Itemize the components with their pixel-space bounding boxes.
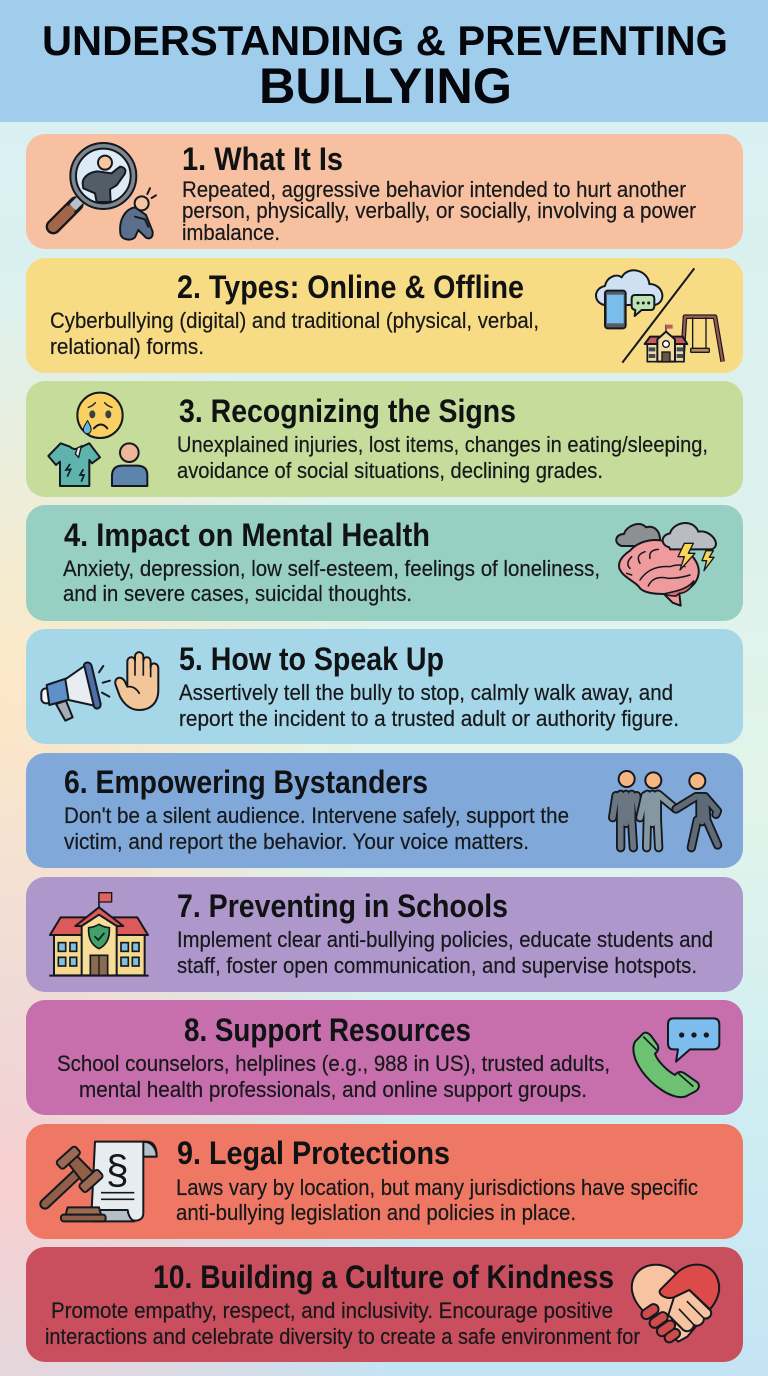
heading 10: 10. Building a Culture of Kindness: [153, 1259, 614, 1295]
heading 4: 4. Impact on Mental Health: [64, 517, 430, 553]
title line 1: UNDERSTANDING & PREVENTING: [42, 17, 728, 64]
body 8: School counselors, helplines (e.g., 988 in US), trusted adults,: [57, 1051, 610, 1076]
body 6: victim, and report the behavior. Your voice matters.: [64, 829, 529, 854]
panel 6: empowering bystanders: [26, 753, 743, 868]
body 8: [57, 1051, 610, 1102]
body 4: Anxiety, depression, low self-esteem, feelings of loneliness,: [63, 556, 600, 581]
heading 5: 5. How to Speak Up: [179, 641, 444, 677]
icon: school with shield: [49, 893, 149, 976]
body 10: [45, 1298, 640, 1349]
heading 3: 3. Recognizing the Signs: [179, 393, 516, 429]
icon: gavel and legal scroll: §: [106, 1146, 129, 1192]
panel 5: how to speak up: [26, 629, 743, 744]
body 6: [64, 803, 569, 854]
icon: sad face, torn shirt, person: [48, 393, 147, 486]
heading 8: 8. Support Resources: [184, 1012, 471, 1048]
body 5: Assertively tell the bully to stop, calmly walk away, and: [179, 680, 673, 705]
body 5: report the incident to a trusted adult or authority figure.: [179, 706, 679, 731]
body 10: interactions and celebrate diversity to create a safe environment for: [45, 1324, 640, 1349]
panel 2: types online and offline: [26, 258, 743, 373]
body 4: and in severe cases, suicidal thoughts.: [63, 581, 412, 606]
body 7: Implement clear anti-bullying policies, educate students and: [177, 927, 713, 952]
heading 2: 2. Types: Online & Offline: [177, 269, 524, 305]
body 5: [179, 680, 679, 731]
panel 1: what it is: [26, 134, 743, 249]
icon: brain under storm clouds: [616, 523, 716, 606]
panel 7: preventing in schools: [26, 877, 743, 992]
heading 9: 9. Legal Protections: [177, 1135, 450, 1171]
body 3: Unexplained injuries, lost items, changes in eating/sleeping,: [177, 432, 708, 457]
panel 10: building a culture of kindness: [26, 1247, 743, 1362]
body 1: Repeated, aggressive behavior intended to hurt another: [182, 177, 686, 202]
panel 9: legal protections: [26, 1124, 743, 1239]
heading 1: 1. What It Is: [182, 141, 343, 177]
body 2: [50, 308, 539, 359]
body 9: [176, 1175, 698, 1225]
body 9: anti-bullying legislation and policies in place.: [176, 1200, 576, 1225]
body 1: person, physically, verbally, or socially, involving a power: [182, 198, 696, 223]
body 3: avoidance of social situations, declining grades.: [177, 458, 603, 483]
body 6: Don't be a silent audience. Intervene safely, support the: [64, 803, 569, 828]
heading 7: 7. Preventing in Schools: [177, 888, 508, 924]
body 2: Cyberbullying (digital) and traditional (physical, verbal,: [50, 308, 539, 333]
icon: phone and speech bubble: [633, 1018, 719, 1097]
heading 6: 6. Empowering Bystanders: [64, 764, 428, 800]
body 7: staff, foster open communication, and supervise hotspots.: [177, 953, 697, 978]
body 3: [177, 432, 708, 483]
icon: gavel and legal scroll: [45, 1142, 157, 1221]
body 8: mental health professionals, and online support groups.: [79, 1077, 587, 1102]
body 9: Laws vary by location, but many jurisdictions have specific: [176, 1175, 698, 1200]
body 4: [63, 556, 600, 606]
icon: magnifier over bully and victim: [53, 143, 156, 240]
icon: heart handshake: [632, 1265, 719, 1344]
body 2: relational) forms.: [50, 334, 204, 359]
header banner: [0, 0, 768, 122]
panel 8: support resources: [26, 1000, 743, 1115]
panel 3: recognizing the signs: [26, 381, 743, 497]
body 10: Promote empathy, respect, and inclusivity. Encourage positive: [51, 1298, 613, 1323]
panel 4: impact on mental health: [26, 505, 743, 621]
title line 2: BULLYING: [259, 58, 512, 114]
body 1: [182, 177, 696, 245]
icon: megaphone and stop hand: [41, 652, 158, 721]
body 1: imbalance.: [182, 220, 280, 245]
icon: online versus offline: [596, 268, 723, 363]
body 7: [177, 927, 713, 978]
icon: three figures shaking hands: [613, 771, 718, 848]
